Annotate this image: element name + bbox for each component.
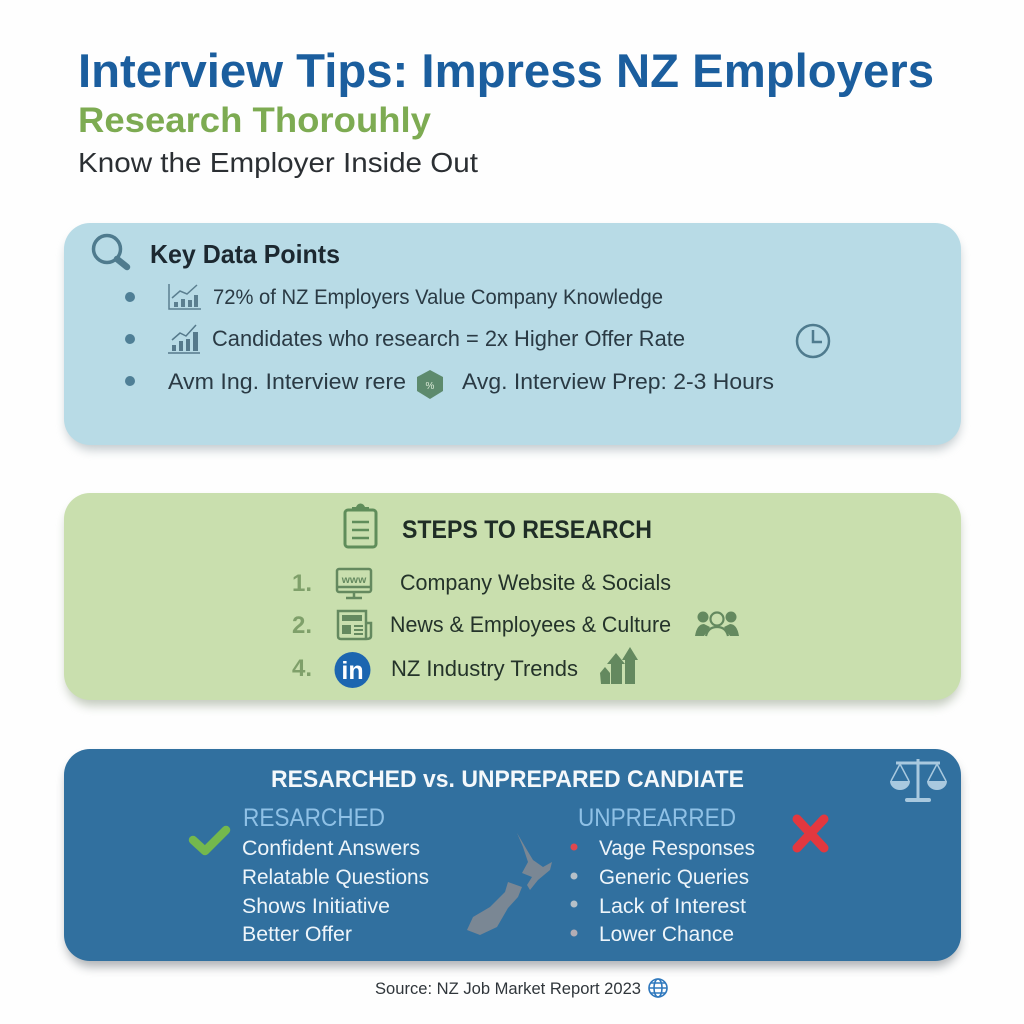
tagline: Know the Employer Inside Out [78, 147, 478, 178]
icon: linkedin [334, 652, 370, 688]
source line: Source: NZ Job Market Report 2023 [375, 980, 641, 998]
text: step 3: NZ Industry Trends [391, 656, 578, 681]
icon: globe [649, 979, 667, 997]
icon: percent badge [417, 370, 443, 399]
panel: steps to research [64, 493, 961, 706]
icon: bar chart up [169, 284, 201, 309]
column: researched: Better Offer [242, 922, 352, 946]
icon: clock [797, 325, 829, 357]
icon: magnifying glass [94, 236, 127, 267]
step numbers: 4. [292, 655, 312, 682]
column: unprepared: Vage Responses [599, 836, 755, 860]
text: step 1: Company Website & Socials [400, 570, 671, 595]
column heading: UNPREARRED [578, 804, 736, 832]
column: unprepared: Lack of Interest [599, 894, 746, 918]
icon: newspaper [338, 611, 371, 639]
icon: www monitor: www [341, 574, 367, 586]
step numbers: 1. [292, 570, 312, 597]
panel: researched vs unprepared [64, 749, 961, 967]
icon: percent badge: % [426, 381, 435, 392]
icon: people [695, 612, 739, 636]
text: prep time stat: Avg. Interview Prep: 2-3 Hours [462, 369, 774, 394]
column: unprepared: Generic Queries [599, 865, 749, 889]
icon: trend arrows [600, 647, 638, 684]
heading: key data points: Key Data Points [150, 239, 340, 269]
icon: clipboard [345, 505, 376, 547]
bullet markers [125, 292, 135, 386]
icon: red cross [797, 819, 824, 848]
text: garbled prep label: Avm Ing. Interview rere [168, 369, 406, 394]
title: Interview Tips: Impress NZ Employers [78, 44, 934, 97]
icon: rising chart [168, 325, 200, 353]
text: step 2: News & Employees & Culture [390, 612, 671, 637]
column: researched: Relatable Questions [242, 865, 429, 889]
column: researched: Shows Initiative [242, 894, 390, 918]
column: unprepared: Lower Chance [599, 922, 734, 946]
column: unprepared [570, 804, 755, 946]
subtitle: research thoroughly: Research Thorouhly [78, 101, 432, 140]
column heading: RESARCHED [243, 804, 385, 832]
heading: steps to research: STEPS TO RESEARCH [402, 516, 652, 544]
text: company knowledge stat: 72% of NZ Employers Value Company Knowledge [213, 286, 663, 309]
panel: key data points [64, 223, 961, 450]
icon: green check [193, 830, 226, 851]
text: offer rate stat: Candidates who research = 2x Higher Offer Rate [212, 326, 685, 351]
heading: comparison: RESARCHED vs. UNPREPARED CANDIATE [271, 766, 744, 793]
icon: scales [890, 759, 947, 800]
icon: linkedin: in [341, 657, 364, 685]
column: researched: Confident Answers [242, 836, 420, 860]
icon: www monitor [337, 569, 371, 598]
column: researched [242, 804, 429, 946]
step numbers: 2. [292, 612, 312, 639]
map: new zealand [467, 833, 552, 935]
step numbers [292, 570, 312, 682]
